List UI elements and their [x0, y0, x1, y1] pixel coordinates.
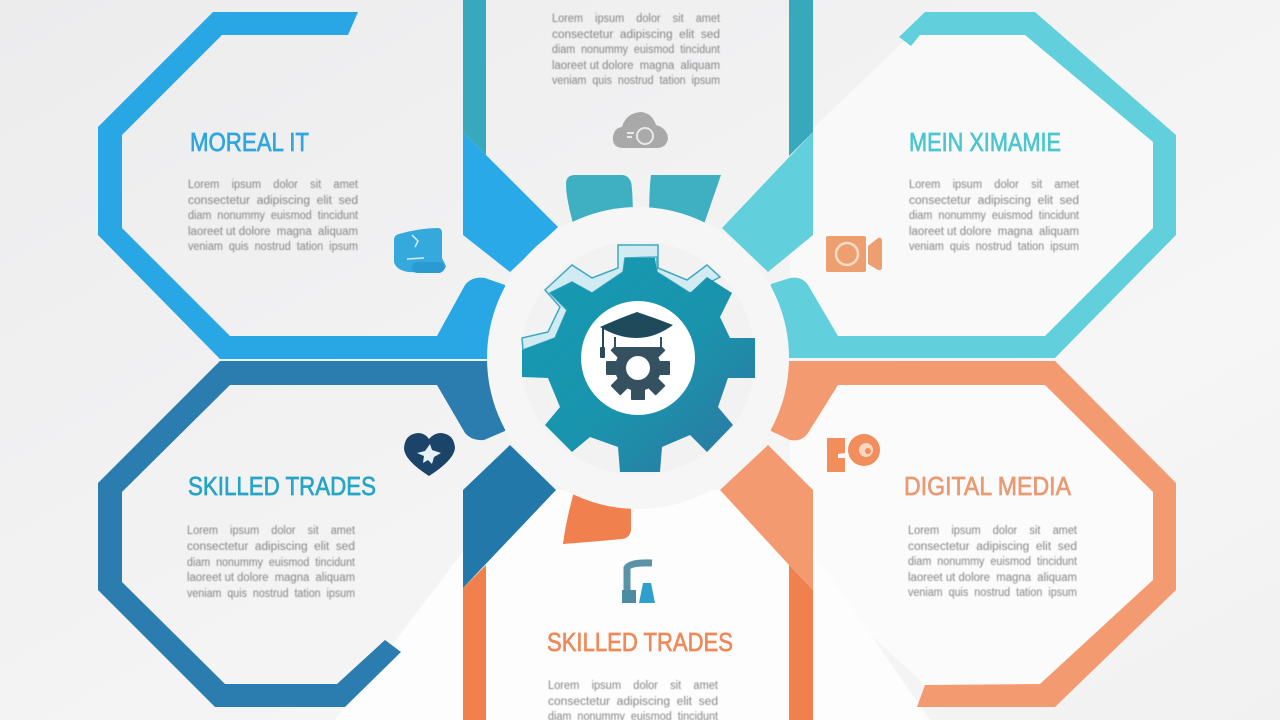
heading: bottom centre: SKILLED TRADES — [547, 627, 733, 657]
text block: bottom right — [908, 525, 1078, 599]
text block: bottom right: laoreet ut dolore magna aliquam — [908, 572, 1077, 584]
icon: heart — [404, 433, 455, 476]
text block: bottom left: diam nonummy euismod tincidunt — [187, 557, 356, 569]
text block: top left: Lorem ipsum dolor sit amet — [188, 179, 359, 191]
text block: top centre: laoreet ut dolore magna aliquam — [552, 60, 720, 72]
text block: bottom centre: Lorem ipsum dolor sit amet — [548, 680, 719, 692]
text block: top right: veniam quis nostrud tation ipsum — [909, 241, 1079, 253]
tab: bottom orange — [563, 488, 631, 544]
text block: top centre: consectetur adipiscing elit sed — [552, 29, 720, 41]
panel: top left blue frame — [98, 12, 520, 359]
shape: blue wedge — [463, 132, 558, 272]
text block: bottom left: laoreet ut dolore magna aliquam — [187, 572, 355, 584]
panel: bottom left dark blue frame — [98, 361, 520, 707]
panel fill: bottom right — [790, 385, 1153, 685]
text block: top left — [188, 179, 359, 253]
text block: top left: consectetur adipiscing elit sed — [188, 195, 358, 207]
text block: top centre — [552, 13, 721, 87]
centre ring — [487, 207, 789, 509]
text block: top right: Lorem ipsum dolor sit amet — [909, 179, 1080, 191]
icon: orange video camera — [826, 236, 882, 272]
text block: bottom right: veniam quis nostrud tation ipsum — [908, 587, 1077, 599]
shape: orange wedge and bottom bars — [463, 445, 813, 720]
text block: top left: veniam quis nostrud tation ipsum — [188, 241, 358, 253]
text block: bottom left: veniam quis nostrud tation ipsum — [187, 588, 355, 600]
panel fill: bottom centre white area — [335, 490, 930, 720]
text block: top right: laoreet ut dolore magna aliquam — [909, 226, 1079, 238]
icon: graduation cap — [600, 312, 673, 358]
shape: light teal wedge — [722, 132, 813, 272]
panel fill: top right — [790, 35, 1153, 336]
text block: top right — [909, 179, 1080, 253]
text block: bottom right: diam nonummy euismod tincidunt — [908, 556, 1078, 568]
icon: orange media mark — [827, 434, 880, 472]
icon: blue tablet — [394, 228, 446, 273]
text block: top right: diam nonummy euismod tincidunt — [909, 210, 1080, 222]
text block: bottom centre: consectetur adipiscing elit sed — [548, 696, 718, 708]
panel: bottom right orange frame — [756, 361, 1176, 707]
heading: top left: MOREAL IT — [190, 127, 309, 157]
text block: bottom right: consectetur adipiscing elit sed — [908, 541, 1077, 553]
heading: bottom left: SKILLED TRADES — [188, 471, 376, 501]
tab: top left teal — [566, 175, 633, 230]
icon: cloud with lock — [613, 112, 668, 148]
tab: top right teal — [649, 175, 721, 230]
text block: top left: diam nonummy euismod tincidunt — [188, 210, 359, 222]
text block: bottom left: consectetur adipiscing elit sed — [187, 541, 355, 553]
icon: robotic arm — [622, 563, 655, 603]
text block: top left: laoreet ut dolore magna aliquam — [188, 226, 358, 238]
shape: dark blue wedge — [463, 445, 556, 588]
text block: top centre: Lorem ipsum dolor sit amet — [552, 13, 721, 25]
panel: top centre teal frame — [463, 0, 813, 156]
text block: bottom right: Lorem ipsum dolor sit amet — [908, 525, 1078, 537]
gear hole — [581, 301, 695, 415]
text block: top centre: veniam quis nostrud tation ipsum — [552, 75, 720, 87]
panel: bottom centre text — [547, 563, 733, 720]
heading: top right: MEIN XIMAMIE — [909, 127, 1061, 157]
text block: top centre: diam nonummy euismod tincidunt — [552, 44, 721, 56]
gear: central emblem — [522, 245, 755, 472]
text block: top right: consectetur adipiscing elit sed — [909, 195, 1079, 207]
centre ring inner disc — [521, 241, 755, 475]
gear body — [522, 258, 755, 472]
icon: small gear — [606, 334, 670, 400]
gear highlight bevel — [522, 245, 720, 350]
heading: bottom right: DIGITAL MEDIA — [904, 471, 1072, 501]
text block: bottom left: Lorem ipsum dolor sit amet — [187, 525, 356, 537]
text block: bottom left — [187, 525, 356, 600]
text block: bottom centre — [548, 680, 719, 720]
panel: top right teal frame — [756, 12, 1176, 358]
